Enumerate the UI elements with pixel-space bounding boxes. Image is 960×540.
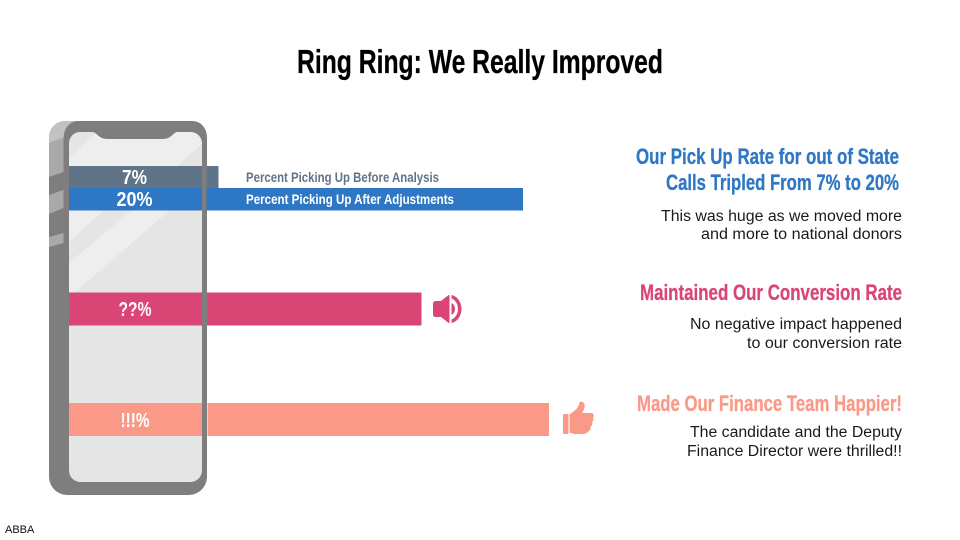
callout body line 2: and more to national donors bbox=[701, 226, 902, 243]
phone illustration bbox=[49, 121, 207, 495]
bar: finance team: !!!% bbox=[120, 410, 150, 432]
callout: pick up rate bbox=[636, 144, 902, 243]
bar: conversion rate bbox=[69, 292, 422, 326]
title: Ring Ring: We Really Improved bbox=[297, 43, 663, 80]
bar: conversion rate: ??% bbox=[118, 299, 152, 321]
callout body: The candidate and the Deputy bbox=[690, 424, 902, 441]
bar: finance team bbox=[69, 403, 549, 436]
bar: after adjustments 20%: 20% bbox=[116, 189, 153, 211]
callout body line 2: Finance Director were thrilled!! bbox=[687, 443, 902, 460]
label: percent picking up after adjustments: Percent Picking Up After Adjustments bbox=[246, 191, 454, 207]
source label: ABBA bbox=[5, 524, 35, 536]
bar: before analysis 7% bbox=[69, 166, 218, 189]
bar: before analysis 7%: 7% bbox=[122, 167, 147, 189]
callout body: This was huge as we moved more bbox=[661, 208, 902, 225]
callout: finance team bbox=[637, 391, 902, 460]
bar: after adjustments 20% bbox=[69, 188, 523, 211]
callout body: No negative impact happened bbox=[690, 316, 902, 333]
callout: conversion rate bbox=[640, 280, 902, 352]
callout body line 2: to our conversion rate bbox=[747, 335, 902, 352]
label: percent picking up before analysis: Percent Picking Up Before Analysis bbox=[246, 169, 439, 185]
icon: thumbs up bbox=[563, 402, 594, 434]
icon: speaker bbox=[433, 295, 462, 323]
